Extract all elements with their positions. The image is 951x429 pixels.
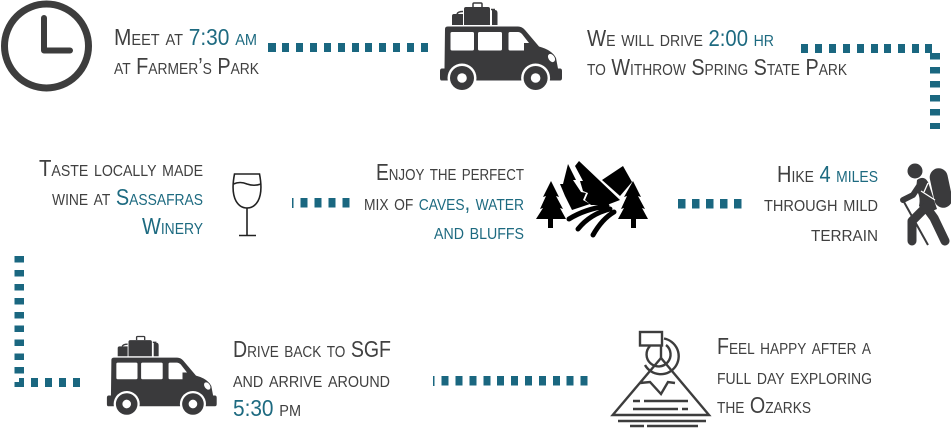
text: hike 4 miles: terrain (811, 220, 878, 246)
text: taste wine at Sassafras (39, 155, 203, 239)
text: drive back to SGF (233, 336, 391, 421)
text: drive to Withrow: We will drive 2:00 hr (587, 25, 774, 51)
text: drive back to SGF: and arrive around (233, 366, 390, 392)
text: hike 4 miles: through mild (764, 190, 878, 216)
text: hike 4 miles (764, 161, 878, 246)
text: enjoy the perfect mix (364, 159, 524, 244)
text: drive back to SGF: 5:30 pm (233, 395, 301, 421)
text: taste wine at Sassafras: Winery (142, 213, 203, 239)
text: hike 4 miles: Hike 4 miles (777, 161, 878, 187)
dotted connector: clock to van (268, 43, 428, 52)
icon: hiker (903, 164, 951, 245)
text: drive to Withrow: to Withrow Spring State Park (587, 54, 847, 80)
text: drive back to SGF: Drive back to SGF (233, 336, 391, 362)
text: feel happy in the Ozarks: full day exploring (717, 363, 872, 389)
dotted connector: return path to van (14, 256, 80, 387)
icon: clock (4, 4, 88, 88)
dotted connector: van to summit (433, 376, 588, 386)
text: taste wine at Sassafras: wine at Sassafras (52, 184, 203, 210)
text: enjoy the perfect mix: mix of caves, water (364, 189, 524, 215)
text: feel happy in the Ozarks: the Ozarks (717, 392, 811, 418)
text: drive to Withrow (587, 25, 847, 80)
text: enjoy the perfect mix: Enjoy the perfect (376, 159, 524, 185)
dotted connector: van to hiker (801, 44, 940, 129)
icon: wine glass (233, 174, 261, 236)
icon: mountains and trees (536, 161, 648, 235)
text: enjoy the perfect mix: and bluffs (434, 218, 524, 244)
dotted connector: mountains to wine (292, 198, 350, 208)
text: meet at park: at Farmer’s Park (114, 53, 259, 79)
text: feel happy in the Ozarks: Feel happy after a (717, 333, 871, 359)
icon: summit with flag (613, 332, 709, 426)
dotted connector: hiker to mountains (678, 199, 742, 208)
text: feel happy in the Ozarks (717, 333, 872, 418)
icon: return van with luggage (107, 336, 217, 417)
text: meet at park: Meet at 7:30 am (114, 24, 257, 50)
text: meet at park (114, 24, 259, 79)
text: taste wine at Sassafras: Taste locally made (39, 155, 203, 181)
icon: van with luggage (440, 3, 562, 92)
